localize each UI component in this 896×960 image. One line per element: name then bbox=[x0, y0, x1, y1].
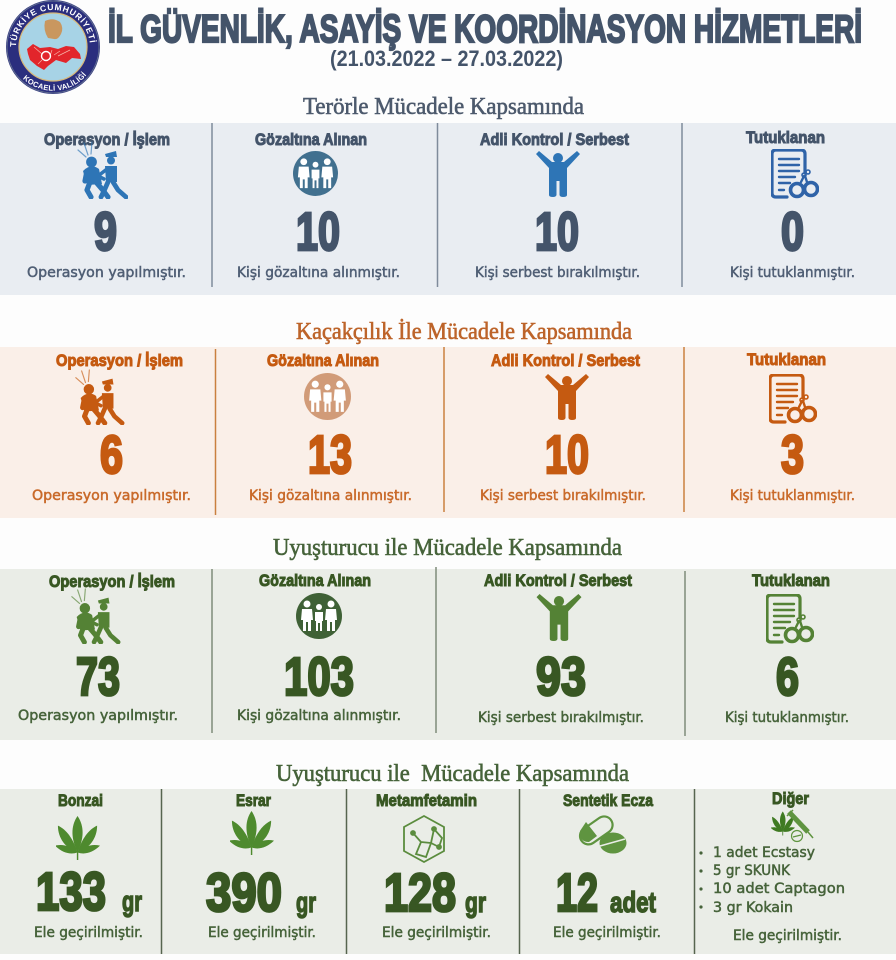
number: 3 bbox=[781, 425, 804, 485]
logo: Kocaeli Valiliği seal bbox=[6, 0, 100, 94]
label: Operasyon / İşlem bbox=[49, 572, 175, 591]
label: Adli Kontrol / Serbest bbox=[491, 351, 640, 370]
panel: terror bbox=[0, 123, 896, 295]
label: Bonzai bbox=[58, 791, 103, 810]
heading: smuggling: Kaçakçılık İle Mücadele Kapsamında bbox=[296, 319, 632, 345]
icon: document and cuffs bbox=[767, 595, 812, 642]
label: Metamfetamin bbox=[376, 791, 477, 810]
number: 103 bbox=[284, 647, 354, 707]
number: 73 bbox=[76, 647, 120, 707]
unit: gr bbox=[296, 887, 316, 919]
icon: document and cuffs bbox=[770, 375, 816, 422]
icon: pills bbox=[577, 813, 626, 854]
label: Tutuklanan bbox=[747, 350, 826, 369]
caption: Kişi serbest bırakılmıştır. bbox=[475, 265, 640, 281]
number: 0 bbox=[781, 202, 804, 262]
number: 10 bbox=[535, 202, 579, 262]
label: Operasyon / İşlem bbox=[56, 351, 183, 370]
logo: Kocaeli Valiliği seal: KOCAELİ VALİLİĞİ bbox=[23, 71, 86, 91]
icon: document and cuffs bbox=[772, 150, 818, 197]
stat: released bbox=[480, 351, 646, 504]
stat: released bbox=[475, 130, 640, 281]
icon: leaf bbox=[55, 816, 100, 860]
label: Gözaltına Alınan bbox=[259, 571, 371, 590]
icon: arrest bbox=[76, 370, 122, 423]
list of other seizures bbox=[699, 845, 845, 916]
label: Diğer bbox=[772, 789, 809, 808]
stat: bonzai bbox=[34, 791, 143, 941]
caption: Kişi tutuklanmıştır. bbox=[730, 488, 855, 504]
label: Gözaltına Alınan bbox=[255, 130, 367, 149]
number: 128 bbox=[384, 863, 456, 923]
caption: Operasyon yapılmıştır. bbox=[18, 708, 178, 724]
label: Adli Kontrol / Serbest bbox=[480, 130, 629, 149]
number: 6 bbox=[776, 647, 799, 707]
stat: released bbox=[478, 571, 644, 726]
list of other seizures: 10 adet Captagon bbox=[713, 881, 845, 897]
stat: operations bbox=[27, 130, 186, 281]
label: Operasyon / İşlem bbox=[44, 130, 170, 149]
caption: Operasyon yapılmıştır. bbox=[32, 488, 191, 504]
label: Gözaltına Alınan bbox=[267, 351, 379, 370]
number: 10 bbox=[545, 425, 589, 485]
caption: Kişi tutuklanmıştır. bbox=[730, 265, 855, 281]
stat: sentetik eczane bbox=[553, 791, 661, 941]
unit: gr bbox=[122, 886, 142, 918]
caption: Kişi serbest bırakılmıştır. bbox=[480, 488, 646, 504]
caption: Ele geçirilmiştir. bbox=[553, 925, 661, 941]
list of other seizures: 5 gr SKUNK bbox=[713, 863, 791, 879]
stat: metamfetamin bbox=[376, 791, 491, 941]
label: Sentetik Ecza bbox=[563, 791, 653, 810]
number: 12 bbox=[556, 863, 598, 923]
unit: gr bbox=[465, 887, 486, 919]
stat: other bbox=[699, 789, 845, 944]
caption: Operasyon yapılmıştır. bbox=[27, 265, 186, 281]
caption: Ele geçirilmiştir. bbox=[208, 925, 316, 941]
number: 390 bbox=[206, 863, 282, 923]
icon: leaf, syringe, pill bbox=[770, 810, 813, 842]
date range: (21.03.2022 – 27.03.2022) bbox=[330, 46, 563, 71]
caption: Ele geçirilmiştir. bbox=[733, 928, 842, 944]
stat: detained bbox=[237, 130, 400, 281]
label: Esrar bbox=[236, 791, 271, 810]
caption: Ele geçirilmiştir. bbox=[382, 925, 491, 941]
number: 10 bbox=[296, 202, 340, 262]
caption: Kişi gözaltına alınmıştır. bbox=[237, 708, 401, 724]
heading: seizures: Uyuşturucu ile Mücadele Kapsamında bbox=[276, 761, 629, 787]
icon: leaf bbox=[229, 811, 274, 855]
number: 6 bbox=[100, 425, 123, 485]
icon: raised arms bbox=[536, 151, 580, 197]
icon: group bbox=[304, 373, 351, 420]
panel: narcotics bbox=[0, 567, 896, 740]
logo: Kocaeli Valiliği seal: TÜRKİYE CUMHURİYETİ bbox=[10, 4, 97, 47]
icon: raised arms bbox=[545, 374, 589, 420]
stat: arrested bbox=[730, 128, 855, 281]
number: 133 bbox=[36, 862, 106, 922]
stat: operations bbox=[18, 572, 178, 724]
caption: Kişi tutuklanmıştır. bbox=[725, 710, 849, 726]
heading: terror: Terörle Mücadele Kapsamında bbox=[303, 94, 584, 120]
icon: arrest bbox=[72, 589, 118, 642]
icon: group bbox=[296, 593, 342, 639]
icon: arrest bbox=[78, 142, 126, 197]
number: 9 bbox=[94, 202, 117, 262]
stat: operations bbox=[32, 351, 191, 504]
caption: Kişi gözaltına alınmıştır. bbox=[237, 265, 400, 281]
icon: molecule bbox=[404, 816, 444, 862]
number: 93 bbox=[536, 647, 586, 707]
stat: arrested bbox=[725, 571, 849, 726]
caption: Ele geçirilmiştir. bbox=[34, 925, 143, 941]
list of other seizures: 1 adet Ecstasy bbox=[713, 845, 815, 861]
stat: detained bbox=[237, 571, 401, 724]
number: 13 bbox=[308, 425, 352, 485]
unit: adet bbox=[610, 887, 656, 919]
label: Tutuklanan bbox=[752, 571, 830, 590]
stat: esrar bbox=[206, 791, 316, 941]
heading: narcotics: Uyuşturucu ile Mücadele Kapsamında bbox=[273, 535, 622, 561]
label: Adli Kontrol / Serbest bbox=[484, 571, 632, 590]
list of other seizures: 3 gr Kokain bbox=[713, 900, 793, 916]
stat: arrested bbox=[730, 350, 855, 504]
panel: seizures bbox=[0, 789, 896, 954]
label: Tutuklanan bbox=[746, 128, 825, 147]
icon: raised arms bbox=[537, 594, 581, 641]
panel: smuggling bbox=[0, 347, 896, 518]
caption: Kişi serbest bırakılmıştır. bbox=[478, 710, 644, 726]
stat: detained bbox=[249, 351, 412, 504]
caption: Kişi gözaltına alınmıştır. bbox=[249, 488, 412, 504]
icon: group bbox=[293, 151, 338, 196]
